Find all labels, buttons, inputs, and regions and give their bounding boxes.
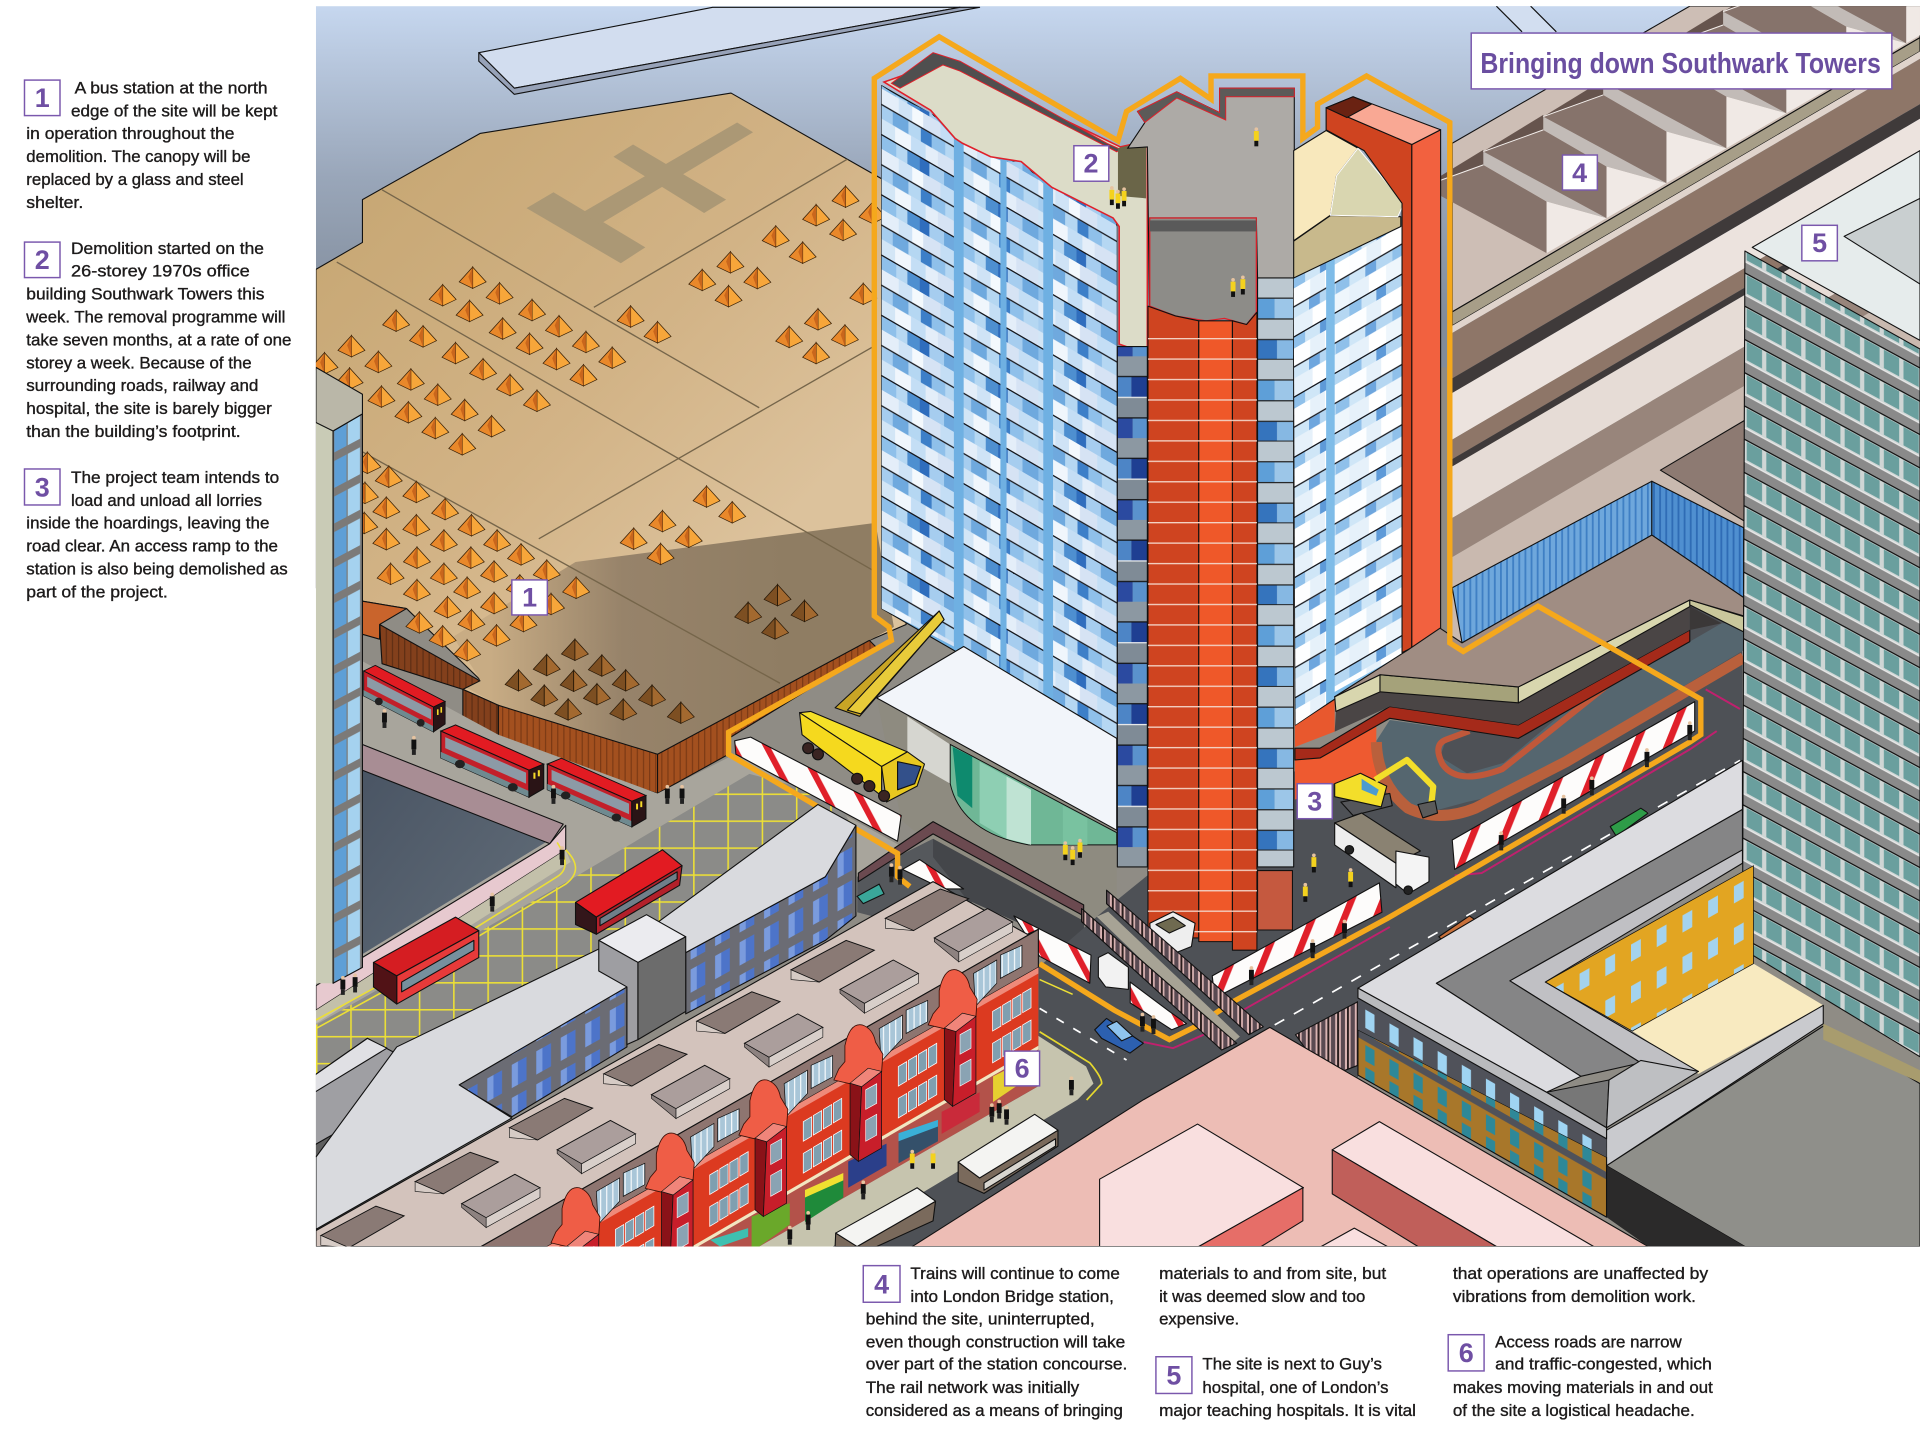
text block 5 <box>1156 1264 1709 1420</box>
text block 4: materials to and from site, but <box>1159 1264 1387 1283</box>
art number tags <box>512 146 1837 1086</box>
ground base <box>316 367 1920 1247</box>
roof seams <box>337 159 876 683</box>
tag 5: 5 <box>1812 228 1827 258</box>
text block 4: over part of the station concourse. <box>866 1355 1127 1374</box>
pink block 3 <box>1321 1228 1387 1247</box>
text block 2: storey a week. Because of the <box>26 353 252 372</box>
right tall hospital tower <box>1742 151 1920 1057</box>
tower workers <box>1109 127 1259 297</box>
corner hip roof <box>1547 1060 1698 1128</box>
tag 4: 4 <box>1572 158 1587 188</box>
canopy shadow <box>453 523 894 754</box>
shopfront base <box>692 1046 1038 1247</box>
service shaft <box>599 915 686 1044</box>
grey ground and tan edge at bottom right <box>1607 1024 1920 1247</box>
roof lights row B <box>462 909 1013 1228</box>
text block 2: surrounding roads, railway and <box>26 376 258 395</box>
red brick terrace shops <box>316 882 1038 1324</box>
coach upper <box>958 1114 1058 1193</box>
title box <box>1471 33 1892 89</box>
upper storey mauve wall <box>481 929 1038 1247</box>
dark road around the site <box>833 576 1742 1247</box>
text block 5: major teaching hospitals. It is vital <box>1159 1401 1416 1420</box>
fascia bands <box>1335 600 1744 711</box>
text block 4: The rail network was initially <box>866 1378 1080 1397</box>
lower core floor <box>1150 218 1256 324</box>
text block 1: edge of the site will be kept <box>71 102 278 121</box>
text block 4: considered as a means of bringing <box>866 1401 1123 1420</box>
moving red bus centre <box>576 850 682 934</box>
text block 4: expensive. <box>1159 1309 1239 1328</box>
pink ground of Guy's hospital campus <box>912 1027 1648 1247</box>
ramp roadway <box>1376 623 1744 813</box>
footbridge over the road <box>1082 890 1263 1050</box>
buses parked at the bus station <box>364 665 684 827</box>
junction road markings <box>1040 980 1127 1060</box>
text block 4 <box>863 1264 1387 1420</box>
text block 3: inside the hoardings, leaving the <box>26 513 269 532</box>
tag 1 <box>512 580 547 615</box>
pitched unit <box>315 1038 437 1157</box>
text block 2: 2 <box>35 245 50 275</box>
red striped site hoardings <box>735 702 1695 1030</box>
yellow inner wall <box>1545 866 1753 1031</box>
street pavement in front of shops <box>759 1036 1093 1247</box>
plaza ground under the canopy <box>316 661 899 1053</box>
right wing base <box>1293 259 1390 726</box>
left wing facade bays <box>882 86 1117 742</box>
text block 5: hospital, one of London’s <box>1202 1378 1389 1397</box>
text block 3: road clear. An access ramp to the <box>26 537 278 556</box>
bus road with yellow box junction <box>316 774 857 1074</box>
office windows north facade <box>686 825 856 1014</box>
tower base ground <box>877 698 1117 931</box>
sky <box>316 6 1920 373</box>
L-shaped hospital block <box>1358 760 1823 1217</box>
tag 2: 2 <box>1084 149 1099 179</box>
tag 6: 6 <box>1015 1054 1030 1084</box>
terrace roof <box>316 882 1038 1247</box>
road markings <box>1275 760 1740 1025</box>
mobile crane <box>800 611 944 802</box>
text block 4: even though construction will take <box>866 1333 1125 1352</box>
cars on the road <box>857 808 1648 943</box>
text block 2: week. The removal programme will <box>25 308 285 327</box>
brick street facade <box>1358 1030 1607 1217</box>
station skylights <box>1423 0 1920 253</box>
red parapet <box>1295 630 1690 760</box>
green curved glass lobby <box>950 744 1117 845</box>
pink retaining wall <box>316 744 566 1010</box>
office lower roof <box>316 949 627 1229</box>
text block 1: replaced by a glass and steel <box>26 170 244 189</box>
pavement <box>316 850 571 1024</box>
pink block 2 <box>1332 1122 1594 1247</box>
glazing recess <box>1690 606 1722 630</box>
elevated platform <box>479 7 980 94</box>
tag 3 <box>1297 784 1332 819</box>
text block 3: load and unload all lorries <box>71 491 262 510</box>
text block 5: 5 <box>1166 1360 1181 1390</box>
excavator <box>1335 760 1438 818</box>
south wing roof edge <box>1607 1005 1823 1166</box>
truck passing under footbridge <box>1098 912 1195 989</box>
blue car at junction <box>1095 1018 1143 1053</box>
text block 6: of the site a logistical headache. <box>1453 1401 1695 1420</box>
pyramid skylights <box>311 186 886 723</box>
gold site boundary line <box>729 37 1701 1040</box>
moving red bus left <box>373 917 479 1004</box>
far railing <box>1107 890 1263 1035</box>
text block 3: The project team intends to <box>71 468 279 487</box>
roof lights row A <box>321 889 969 1248</box>
excavator cab window <box>1362 779 1379 796</box>
London Bridge station roofs <box>1423 0 1920 686</box>
isometric illustration of the demolition site <box>311 0 1920 1324</box>
cut-away floor slab <box>884 61 1147 354</box>
text block 5: that operations are unaffected by <box>1453 1264 1709 1283</box>
orange forecourt <box>1294 700 1377 800</box>
text block 6: and traffic-congested, which <box>1495 1355 1712 1374</box>
white tipper truck <box>1335 813 1429 894</box>
bus stop people <box>382 709 684 804</box>
text block 4: behind the site, uninterrupted, <box>866 1309 1095 1328</box>
tag 4 <box>1562 155 1597 190</box>
text block 3: station is also being demolished as <box>26 559 288 578</box>
roadside pedestrians <box>340 846 902 995</box>
tower roof <box>1752 151 1920 340</box>
text block 2: take seven months, at a rate of one <box>26 331 291 350</box>
office windows lower facade <box>458 987 627 1117</box>
tag 2 <box>1074 146 1109 181</box>
station access ramp <box>1295 535 1744 816</box>
left office block <box>316 367 362 983</box>
tag 3: 3 <box>1307 787 1322 817</box>
text block 1 <box>24 78 278 212</box>
block roof <box>1510 850 1742 1071</box>
text block 1: 1 <box>35 83 50 113</box>
red facade <box>547 967 1038 1247</box>
text block 2: Demolition started on the <box>71 239 264 258</box>
text block 1: demolition. The canopy will be <box>26 147 250 166</box>
text block 1: in operation throughout the <box>26 124 234 143</box>
office long roof <box>647 804 856 953</box>
text block 4: 4 <box>874 1269 889 1299</box>
pink block 1 <box>1100 1124 1303 1247</box>
tag 5 <box>1802 225 1837 261</box>
text block 2: hospital, the site is barely bigger <box>26 399 272 418</box>
excavator tracks <box>1341 793 1392 816</box>
text block 4: Trains will continue to come <box>910 1264 1120 1283</box>
shop fronts <box>710 1063 1020 1247</box>
excavator bucket <box>1418 801 1438 818</box>
canopy timber fascia walls <box>362 601 877 793</box>
lobby workers <box>1063 839 1082 865</box>
text block 5: The site is next to Guy’s <box>1202 1355 1382 1374</box>
helipad marking <box>527 122 753 263</box>
core window strips <box>1117 347 1147 867</box>
right wing facade bays <box>1294 214 1409 725</box>
service deck under the tower plaza <box>857 821 1084 942</box>
text block 6: Access roads are narrow <box>1495 1333 1683 1352</box>
blue glazed wall <box>1452 481 1744 643</box>
upper concrete core <box>1128 88 1294 328</box>
tan bus station canopy roof <box>311 93 906 754</box>
text block 6: 6 <box>1459 1338 1474 1368</box>
gabled bays <box>551 945 1031 1324</box>
text block 6: makes moving materials in and out <box>1453 1378 1713 1397</box>
left wing base <box>882 86 1117 744</box>
text block 3: part of the project. <box>26 583 168 602</box>
tag 1: 1 <box>522 583 537 613</box>
text block 5: vibrations from demolition work. <box>1453 1287 1696 1306</box>
pink cornice <box>547 967 1038 1247</box>
distant track lines <box>1496 6 1556 32</box>
magenta kerb line <box>1144 689 1740 1048</box>
courtyard <box>1632 964 1823 1074</box>
cut-away right floors <box>1294 216 1401 278</box>
dark glazing <box>1335 607 1690 732</box>
grey office block <box>315 804 856 1229</box>
text block 2: 26-storey 1970s office <box>71 262 250 281</box>
text block 1: A bus station at the north <box>75 78 268 97</box>
tag 6 <box>1005 1051 1040 1086</box>
yellow kerb lines <box>1040 1032 1102 1100</box>
text block 3 <box>24 468 288 602</box>
flat brown roof <box>1335 535 1744 697</box>
site workers and pedestrians <box>1140 721 1692 1034</box>
excavator arm <box>1375 760 1433 803</box>
sunken slate forecourt <box>359 770 547 956</box>
text block 4: it was deemed slow and too <box>1159 1287 1365 1306</box>
text block 4: into London Bridge station, <box>910 1287 1114 1306</box>
white entrance canopy <box>877 647 1117 830</box>
red service column <box>1326 97 1441 653</box>
ramp outer wall <box>1376 658 1744 816</box>
hairpin island <box>1440 699 1580 773</box>
text block 2: than the building’s footprint. <box>26 422 241 441</box>
deck <box>1097 912 1240 1045</box>
hairpin wall <box>1438 677 1618 776</box>
text block 6 <box>1448 1333 1713 1420</box>
far footbridge section <box>1296 1002 1358 1078</box>
Southwark Towers <box>882 53 1441 950</box>
coach lower <box>835 1188 936 1247</box>
shoppers on pavement <box>787 1076 1074 1245</box>
text block 2: building Southwark Towers this <box>26 284 264 303</box>
text block 2 <box>24 239 291 441</box>
excavator body <box>1335 773 1387 807</box>
text block 1: shelter. <box>26 193 83 212</box>
text block 3: 3 <box>35 472 50 502</box>
cream shop fascia <box>692 1046 1038 1247</box>
red brick core columns <box>1148 306 1257 950</box>
near railing <box>1082 909 1237 1050</box>
